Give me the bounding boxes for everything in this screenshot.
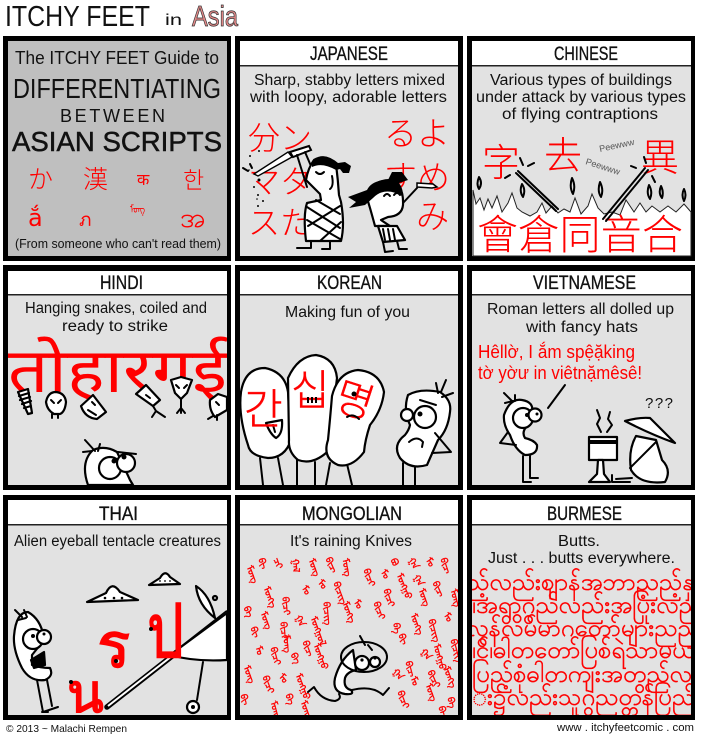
Mongolian script rain: ᠮᠣᠩ: [422, 682, 440, 703]
panel: intro: (From someone who can't read them): [15, 236, 221, 251]
Mongolian script rain: ᠪᠢᠴᠢᠭ: [447, 638, 464, 664]
three mocking blobs: [240, 355, 384, 485]
seated figure with conical hat: ???: [645, 395, 673, 412]
samurai figure: [243, 146, 351, 249]
panel: intro: ắ: [28, 203, 43, 232]
Mongolian script rain: ᠮᠣ: [315, 577, 330, 592]
Mongolian script rain: ᠮᠣᠩᠭᠣ: [310, 642, 331, 671]
Mongolian script rain: ᠴᠢ: [270, 556, 284, 571]
Mongolian script rain: ᠮᠣᠩ: [339, 557, 354, 577]
panel: Burmese: Butts.: [558, 533, 600, 550]
panel: Chinese: Peewww: [584, 156, 622, 177]
panel: Vietnamese: [467, 265, 695, 490]
panel: Chinese: Various types of buildings: [490, 72, 672, 89]
panel: Mongolian: It's raining Knives: [290, 533, 412, 550]
Mongolian script rain: ᠭᠠᠯ: [289, 558, 301, 573]
panel: Chinese: [467, 36, 695, 261]
panel: intro: ASIAN SCRIPTS: [12, 126, 222, 157]
Mongolian script rain: ᠮᠣᠩ: [280, 634, 294, 653]
Mongolian script rain: ᠮᠣᠩ: [240, 664, 258, 685]
panel: intro: The ITCHY FEET Guide to: [15, 48, 219, 68]
Thai letters: ป: [147, 588, 184, 675]
Mongolian script rain: ᠪᠢᠴᠢ: [360, 567, 377, 589]
panel: Korean: Making fun of you: [285, 304, 410, 321]
Mongolian script rain: ᠮᠣ: [440, 610, 455, 624]
Mongolian script rain: ᠮᠣᠩ: [305, 557, 323, 578]
Mongolian script rain: ᠪᠢᠴᠢ: [267, 646, 283, 667]
panel: Hindi: HINDI: [100, 273, 143, 294]
running character: [308, 636, 389, 701]
three mocking blobs: 간: [244, 386, 283, 433]
Mongolian script rain: ᠮᠣᠩᠭ: [260, 585, 279, 610]
Mongolian script rain: ᠮᠣᠩᠭᠣᠯ: [307, 615, 329, 648]
Mongolian script rain: ᠪᠢᠴᠢ: [394, 689, 411, 711]
Thai letters: [67, 588, 184, 725]
Mongolian script rain: ᠮᠣᠩᠭᠣ: [393, 572, 414, 601]
panel: Burmese: Just . . . butts everywhere.: [488, 550, 675, 567]
Mongolian script rain: ᠪᠠ: [287, 651, 303, 667]
Mongolian script rain: ᠮᠣ: [298, 584, 313, 597]
Mongolian script rain: ᠪᠢᠴᠢ: [370, 600, 387, 622]
Mongolian script rain: ᠮᠣ: [377, 568, 392, 581]
lantern with steam: [589, 410, 617, 482]
panel: Japanese: with loopy, adorable letters: [249, 89, 447, 106]
Mongolian script rain: ᠪᠢᠴᠢ: [424, 669, 442, 690]
Mongolian script rain: ᠪᠠ: [239, 605, 255, 621]
panel: intro: အ: [180, 201, 206, 234]
seated figure with conical hat: [612, 395, 675, 482]
Mongolian script rain: ᠪᠢ: [237, 693, 251, 707]
Mongolian script rain: ᠪᠢᠴᠢ: [277, 621, 290, 641]
panel: Vietnamese: with fancy hats: [525, 319, 638, 336]
panel: Chinese: CHINESE: [554, 44, 618, 65]
three mocking blobs: 명: [330, 373, 380, 428]
Mongolian script rain: ᠪᠢᠴᠢ: [380, 588, 396, 609]
Mongolian script rain: ᠪᠢᠴ: [402, 660, 417, 679]
panel: Korean: [235, 265, 463, 490]
panel: intro: 漢: [83, 166, 108, 194]
Mongolian script rain: ᠮᠣᠩ: [243, 564, 261, 585]
panel: Vietnamese: tờ yờư in viêtnặmêsê!: [478, 363, 642, 383]
panel: intro: क: [137, 170, 150, 189]
Mongolian script rain: ᠮᠣ: [252, 645, 266, 656]
Mongolian script rain: ᠪᠢᠴ: [437, 557, 453, 576]
panel: Japanese: スた: [248, 205, 312, 241]
Mongolian script rain: ᠭᠠ: [292, 613, 308, 630]
Mongolian script rain: ᠭᠠ: [390, 666, 407, 683]
panel: intro: ภ: [79, 209, 92, 231]
Mongolian script rain: ᠮᠣ: [276, 671, 291, 686]
panel: Chinese: 異: [641, 138, 679, 180]
spaceship ramp: [107, 586, 227, 713]
Mongolian script rain: ᠮᠣᠩᠭ: [440, 665, 459, 690]
Mongolian script rain: ᠪᠠ: [389, 622, 402, 635]
panel: Japanese: 分ン: [248, 120, 312, 156]
Burmese script rows: [466, 566, 701, 717]
panel: Japanese: JAPANESE: [310, 44, 388, 65]
sound effects: Peewww: [598, 137, 636, 154]
Mongolian script rain: ᠪᠢᠴᠢᠭ: [425, 618, 442, 644]
Mongolian script rain: ᠮᠣᠩ: [297, 699, 315, 720]
Mongolian script rain: ᠮᠣ: [422, 556, 437, 569]
Mongolian script rain: ᠮᠣᠩᠭ: [407, 612, 426, 637]
panel: intro: 한: [183, 167, 204, 193]
scared character: [14, 610, 58, 712]
Mongolian script rain: ᠮᠣᠩ: [267, 700, 283, 720]
panel: Korean: KOREAN: [317, 273, 382, 294]
Mongolian script rain: ᠮᠣᠩᠭᠣ: [292, 672, 313, 701]
girl figure: [348, 172, 437, 252]
Mongolian script rain: ᠪᠢ: [247, 625, 262, 640]
panel: Thai: Alien eyeball tentacle creatures: [14, 533, 221, 550]
panel: Chinese: 去: [544, 136, 582, 178]
Mongolian script rain: ᠪᠠ: [443, 696, 458, 711]
Mongolian script rain: ᠪᠢᠴᠢᠭ: [320, 601, 333, 626]
Mongolian script rain: ᠪᠢ: [395, 632, 410, 647]
panel: Burmese: [466, 495, 701, 720]
Mongolian script rain: ᠪᠢᠴ: [322, 556, 339, 575]
panel: Thai: THAI: [99, 504, 138, 525]
hanging snakes: [18, 377, 227, 420]
panel: Chinese: under attack by various types: [476, 89, 686, 106]
Hindi script: तोहारगई: [8, 334, 229, 407]
Thai letters: ร: [97, 609, 130, 682]
panel: Chinese: 字: [482, 143, 520, 185]
Mongolian script rain: ᠭᠠ: [405, 556, 422, 572]
panel: intro: [3, 36, 231, 261]
Mongolian script rain: ᠮᠣᠩ: [415, 587, 433, 608]
annoyed character: [397, 380, 453, 485]
Mongolian script rain: [237, 556, 464, 720]
header title: in: [165, 12, 182, 29]
Thai letters: น: [67, 662, 104, 725]
Mongolian script rain: ᠭᠠ: [410, 572, 427, 589]
UFOs: [87, 573, 180, 602]
header title: Asia: [192, 1, 239, 33]
panel: Japanese: [235, 36, 463, 261]
panel: intro: BETWEEN: [60, 106, 165, 126]
panel: Japanese: Sharp, stabby letters mixed: [254, 72, 445, 89]
Mongolian script rain: ᠪᠢᠴ: [299, 639, 315, 659]
bottom glyph row: 會倉同音合: [477, 212, 683, 258]
panel: intro: ᠮᠣᠩ: [130, 203, 145, 216]
panel: intro: DIFFERENTIATING: [13, 73, 221, 104]
panel: Vietnamese: Roman letters all dolled up: [487, 301, 674, 318]
Mongolian script rain: ᠪᠢ: [255, 557, 269, 571]
Mongolian script rain: ᠮᠣ: [407, 675, 421, 687]
panel: Mongolian: MONGOLIAN: [302, 504, 402, 525]
Mongolian script rain: ᠪᠢᠴᠢ: [279, 596, 292, 616]
Mongolian script rain: ᠪᠠ: [281, 692, 297, 708]
panel: Mongolian: [235, 495, 464, 720]
footer credit: © 2013 ~ Malachi Rempen: [6, 723, 127, 735]
panel: Japanese: すめ: [384, 159, 450, 196]
Mongolian script rain: ᠮᠣ: [350, 598, 365, 611]
Mongolian script rain: ᠭᠠ: [418, 646, 435, 663]
panel: Chinese: of flying contraptions: [502, 106, 658, 123]
panel: Hindi: [3, 265, 231, 490]
panel: Hindi: ready to strike: [62, 318, 168, 335]
panel: Japanese: るよ: [384, 115, 450, 152]
panel: Thai: [3, 495, 231, 725]
Mongolian script rain: ᠪᠣ: [387, 557, 401, 569]
Mongolian script rain: ᠪᠢᠴᠢᠭ: [330, 580, 349, 607]
panel: Vietnamese: VIETNAMESE: [533, 273, 636, 294]
panel: Japanese: み: [416, 198, 449, 235]
three mocking blobs: 십: [291, 367, 330, 414]
contraption beams: [505, 157, 655, 221]
Mongolian script rain: ᠪᠢᠴ: [429, 580, 446, 599]
Mongolian script rain: ᠮᠣᠩᠭ: [339, 600, 358, 625]
panel: Burmese: BURMESE: [547, 504, 622, 525]
panel: Vietnamese: Hêllờ, I ắm spệặking: [478, 341, 635, 362]
header title: ITCHY FEET: [5, 1, 150, 33]
flames: [473, 190, 691, 256]
panel: Hindi: Hanging snakes, coiled and: [25, 300, 207, 317]
Mongolian script rain: ᠮᠣᠩ: [447, 588, 463, 608]
speaker character: [500, 385, 565, 482]
bug-eyed character peeking: [83, 440, 136, 485]
Mongolian script rain: ᠮᠣᠩᠭᠣ: [430, 643, 449, 672]
Mongolian script rain: ᠪᠢᠴᠢ: [259, 674, 276, 696]
panel: intro: か: [28, 166, 53, 194]
Mongolian script rain: ᠪᠠ: [434, 705, 449, 720]
Mongolian script rain: ᠮᠣᠩ: [257, 610, 275, 631]
footer website: www . itchyfeetcomic . com: [556, 722, 694, 734]
panel: Japanese: マタ: [248, 164, 312, 200]
